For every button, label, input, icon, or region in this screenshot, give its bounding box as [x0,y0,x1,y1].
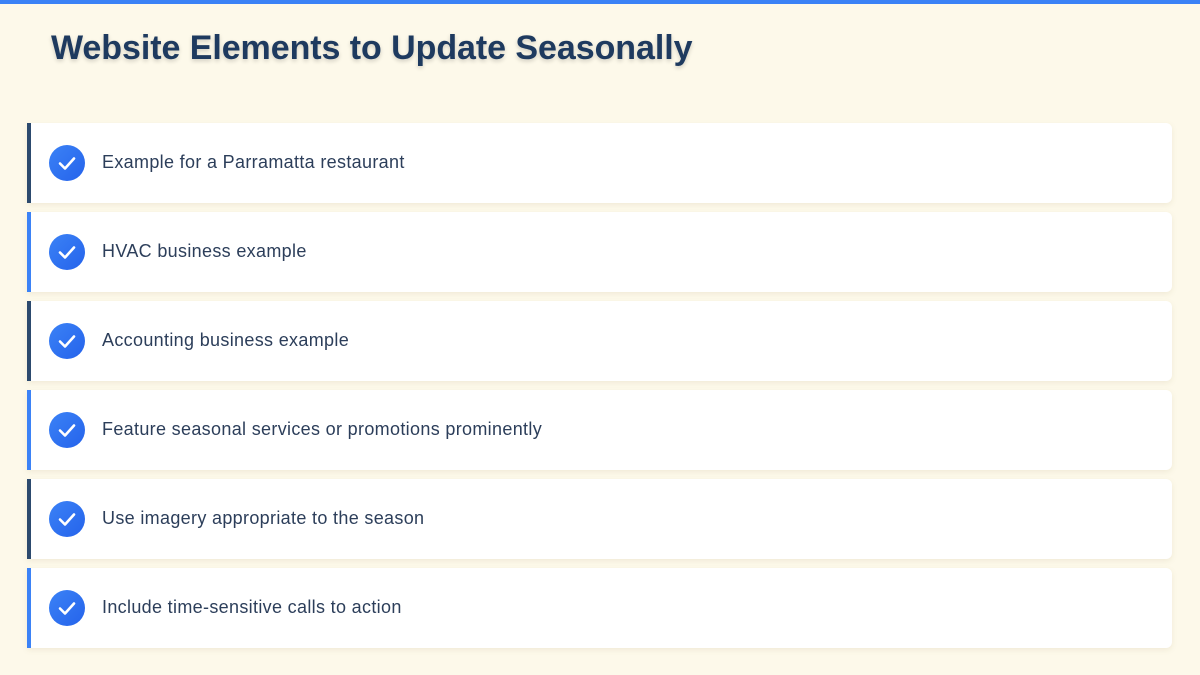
card: imagery: Use imagery appropriate to the season [102,508,424,528]
card: restaurant: Example for a Parramatta restaurant [102,152,405,172]
card: accounting [27,301,1172,381]
card: HVAC [27,212,1172,292]
card: HVAC: HVAC business example [102,241,307,261]
title: Website Elements to Update Seasonally [51,29,692,67]
card: accounting: Accounting business example [102,330,349,350]
card: seasonal services: Feature seasonal services or promotions prominently [102,419,542,439]
icon: check [49,145,85,181]
icon: check [49,234,85,270]
card: seasonal services [27,390,1172,470]
icon: check [49,590,85,626]
card: restaurant [27,123,1172,203]
card: imagery [27,479,1172,559]
icon: check [49,501,85,537]
card: calls to action: Include time-sensitive calls to action [102,597,402,617]
icon: check [49,412,85,448]
icon: check [49,323,85,359]
card: calls to action [27,568,1172,648]
